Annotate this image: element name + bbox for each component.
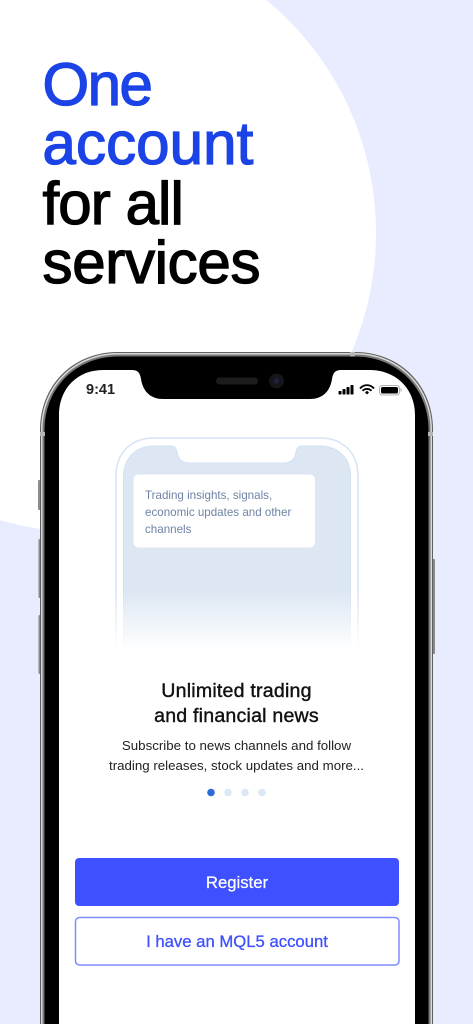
phone frame <box>40 352 433 1024</box>
status bar time: 9:41 <box>86 382 115 398</box>
feature heading: Unlimited trading <box>161 680 312 702</box>
illustration: message card <box>134 474 315 548</box>
phone side buttons <box>38 480 435 674</box>
feature description: trading releases, stock updates and more... <box>109 758 364 772</box>
Register label: Register <box>206 873 268 892</box>
pagination dots <box>207 789 266 796</box>
card text: Trading insights, signals, <box>145 489 272 502</box>
title: for all <box>42 170 183 237</box>
status icons <box>338 385 402 395</box>
feature description: Subscribe to news channels and follow <box>122 738 351 753</box>
title: account <box>42 110 253 177</box>
feature description <box>109 738 364 772</box>
button: Register background <box>75 858 399 906</box>
notch speaker and camera <box>216 374 284 388</box>
white background circle <box>0 0 376 532</box>
illustration: mini phone outline <box>112 438 362 652</box>
feature heading: and financial news <box>154 705 319 727</box>
title: services <box>42 229 260 296</box>
card text: channels <box>145 523 191 536</box>
title <box>42 51 260 296</box>
title: One <box>42 51 151 118</box>
MQL5 label: I have an MQL5 account <box>146 932 328 951</box>
phone screen with notch <box>59 370 415 1024</box>
button: MQL5 outline <box>76 918 399 965</box>
card text <box>145 489 292 536</box>
card text: economic updates and other <box>145 506 291 519</box>
feature heading <box>154 680 319 727</box>
